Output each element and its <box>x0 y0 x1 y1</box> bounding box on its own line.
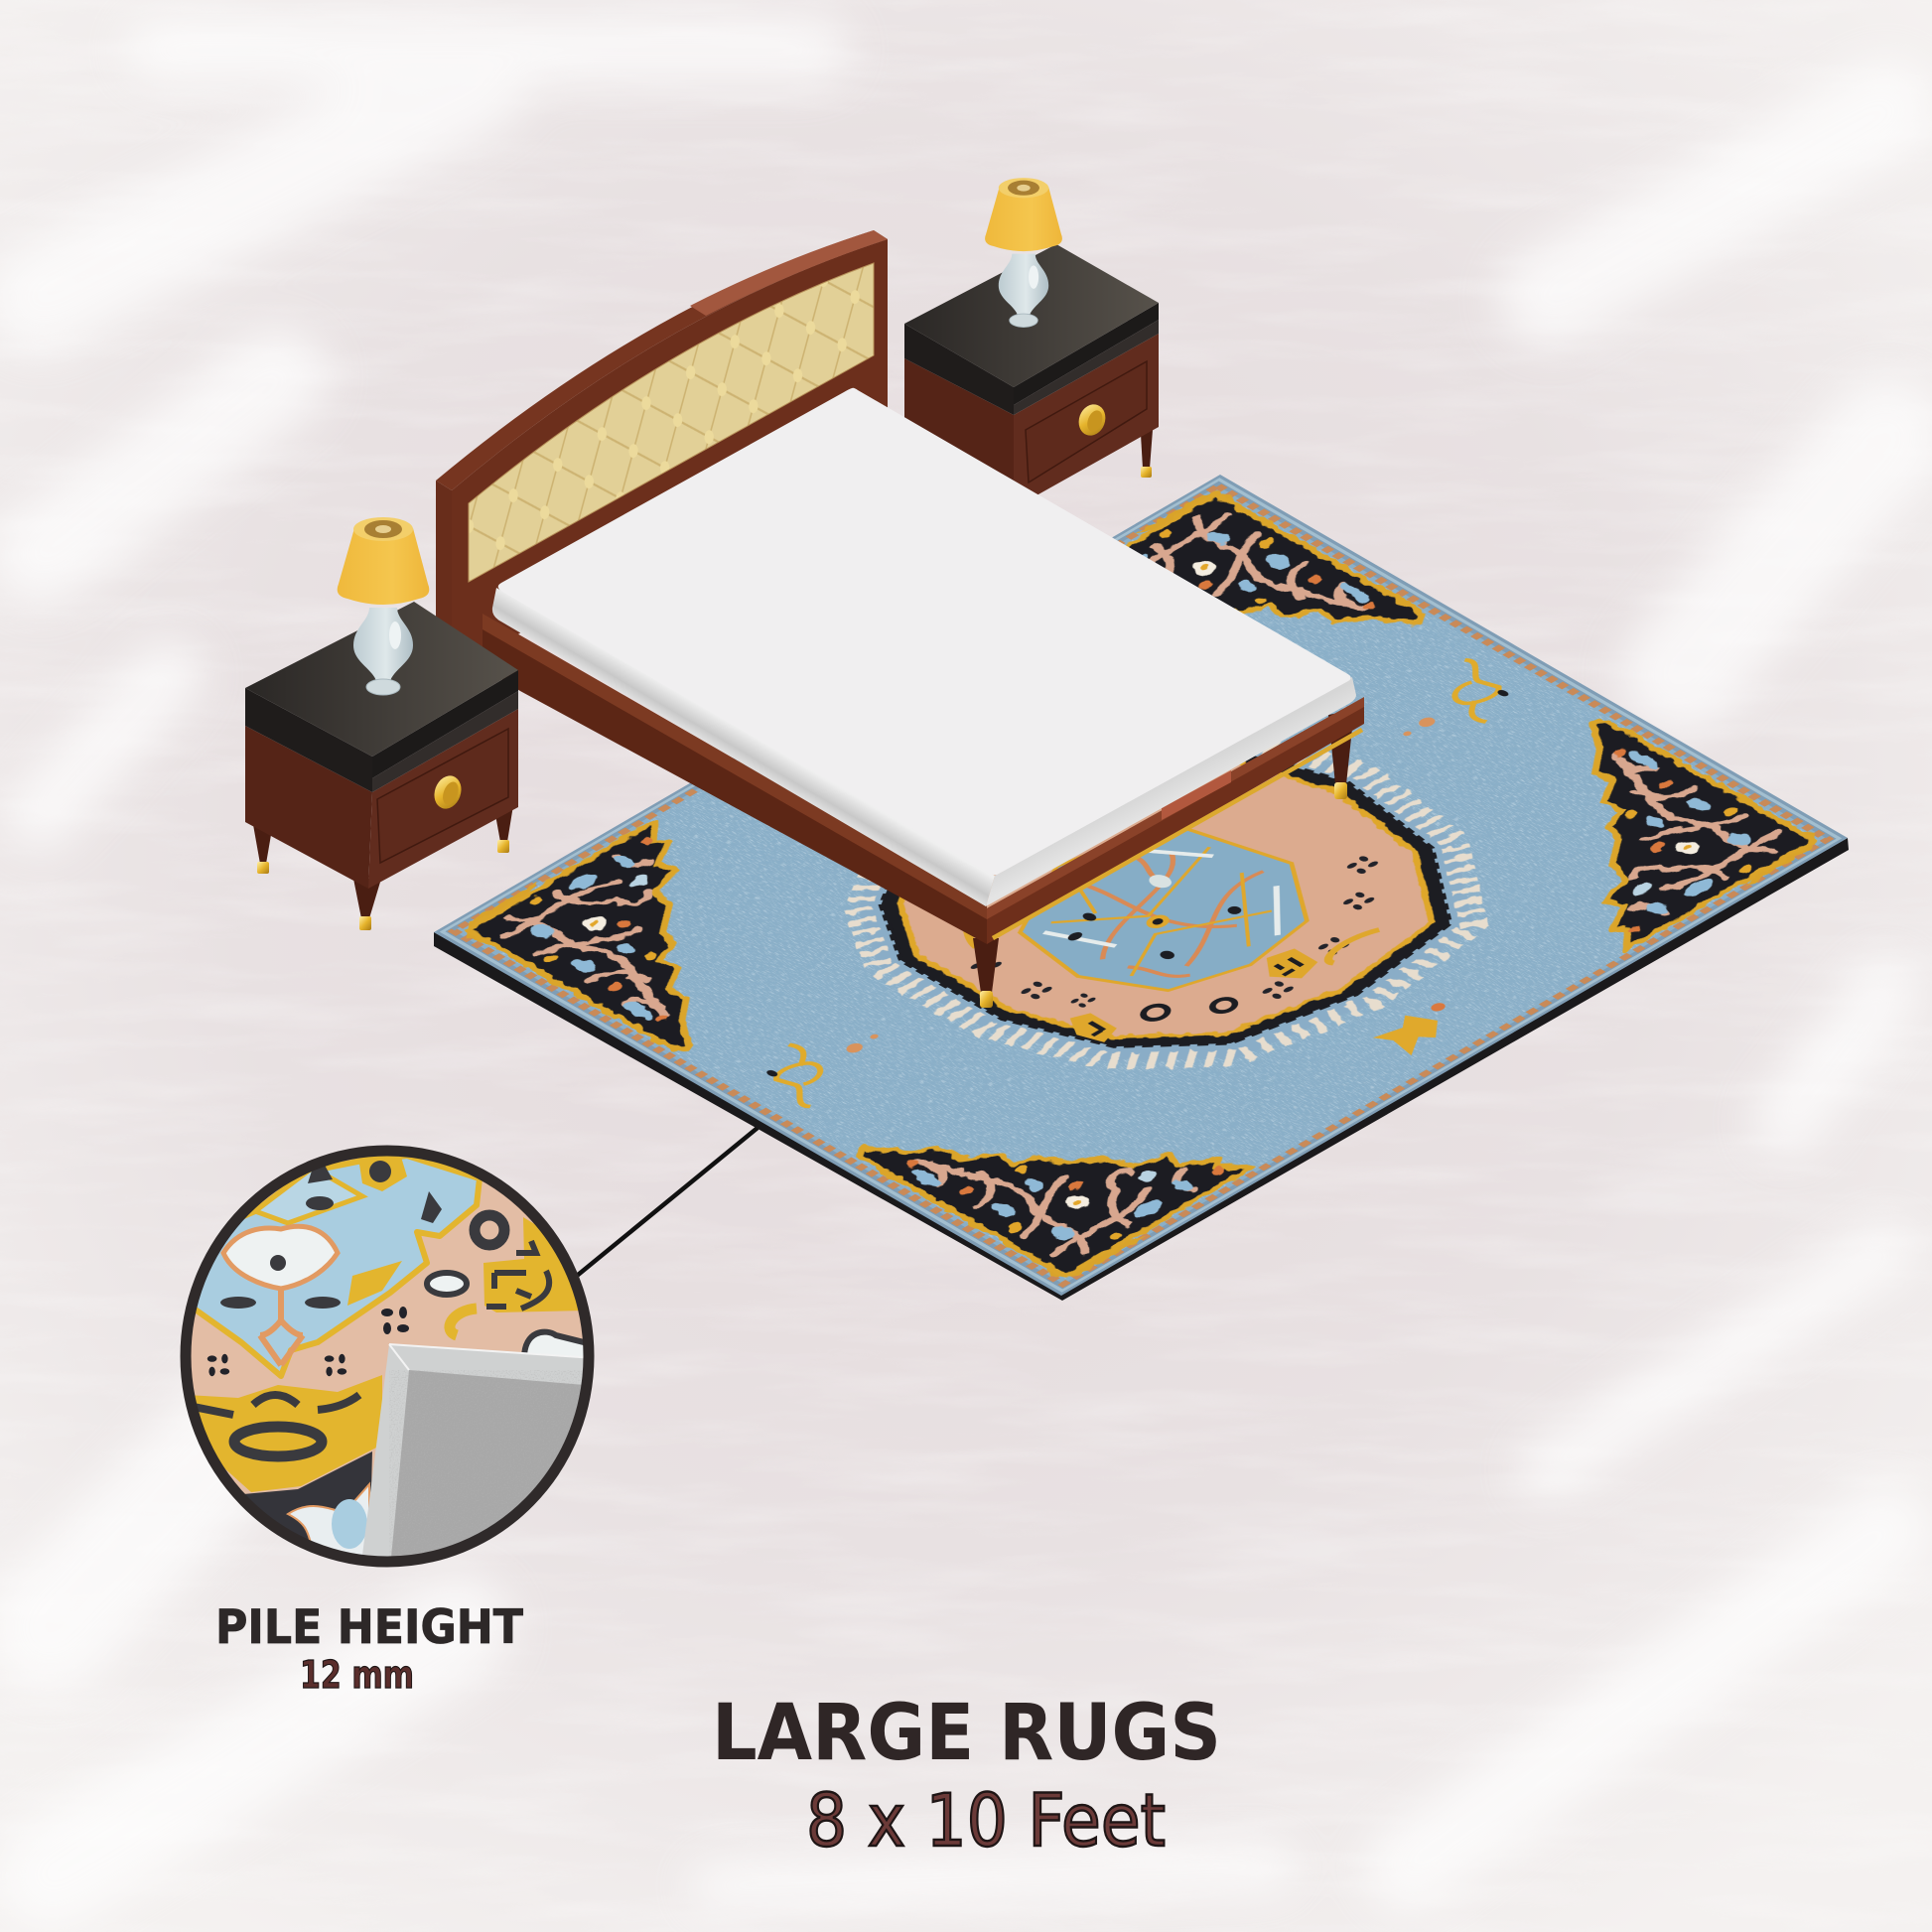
left stand knob <box>430 772 466 812</box>
left lamp <box>338 517 429 695</box>
lower yellow band <box>195 1375 382 1492</box>
yellow block right <box>483 1217 586 1312</box>
rug surface <box>434 475 1848 1296</box>
leader line <box>577 1128 758 1276</box>
bed <box>436 230 1364 1008</box>
medallion small motifs <box>1315 935 1352 957</box>
medallion centre <box>973 797 1358 1021</box>
black and blue lower pattern <box>244 1451 372 1540</box>
left nightstand <box>245 602 518 930</box>
right lamp <box>985 178 1062 328</box>
field motifs <box>745 654 1781 1257</box>
blue pattern field <box>169 1156 480 1376</box>
dark petals <box>220 1297 256 1309</box>
corner spandrels <box>454 486 1828 1284</box>
bed legs <box>973 710 1354 1008</box>
right stand legs <box>1140 417 1154 478</box>
left stand drawer <box>377 729 508 863</box>
inset detail circle <box>181 1146 594 1567</box>
mattress <box>492 388 1356 906</box>
medallion <box>745 651 1567 1128</box>
right stand knob <box>1074 401 1110 439</box>
floral medallion <box>223 1226 338 1289</box>
right stand top <box>1014 320 1159 415</box>
pile height value: 12 mm <box>300 1653 414 1697</box>
grey rug backing <box>362 1345 584 1557</box>
title: LARGE RUGS <box>712 1689 1221 1778</box>
right nightstand <box>904 244 1159 508</box>
left stand legs <box>252 799 514 930</box>
size subtitle: 8 x 10 Feet <box>806 1779 1166 1863</box>
left stand top <box>372 691 518 792</box>
bed frame <box>483 614 1364 944</box>
pile height label: PILE HEIGHT <box>215 1600 523 1655</box>
headboard cushion <box>469 263 874 582</box>
rug thickness <box>434 838 1849 1301</box>
inset ring <box>186 1151 589 1562</box>
headboard <box>436 230 888 655</box>
rug <box>434 475 1849 1301</box>
right stand drawer <box>1026 361 1147 483</box>
